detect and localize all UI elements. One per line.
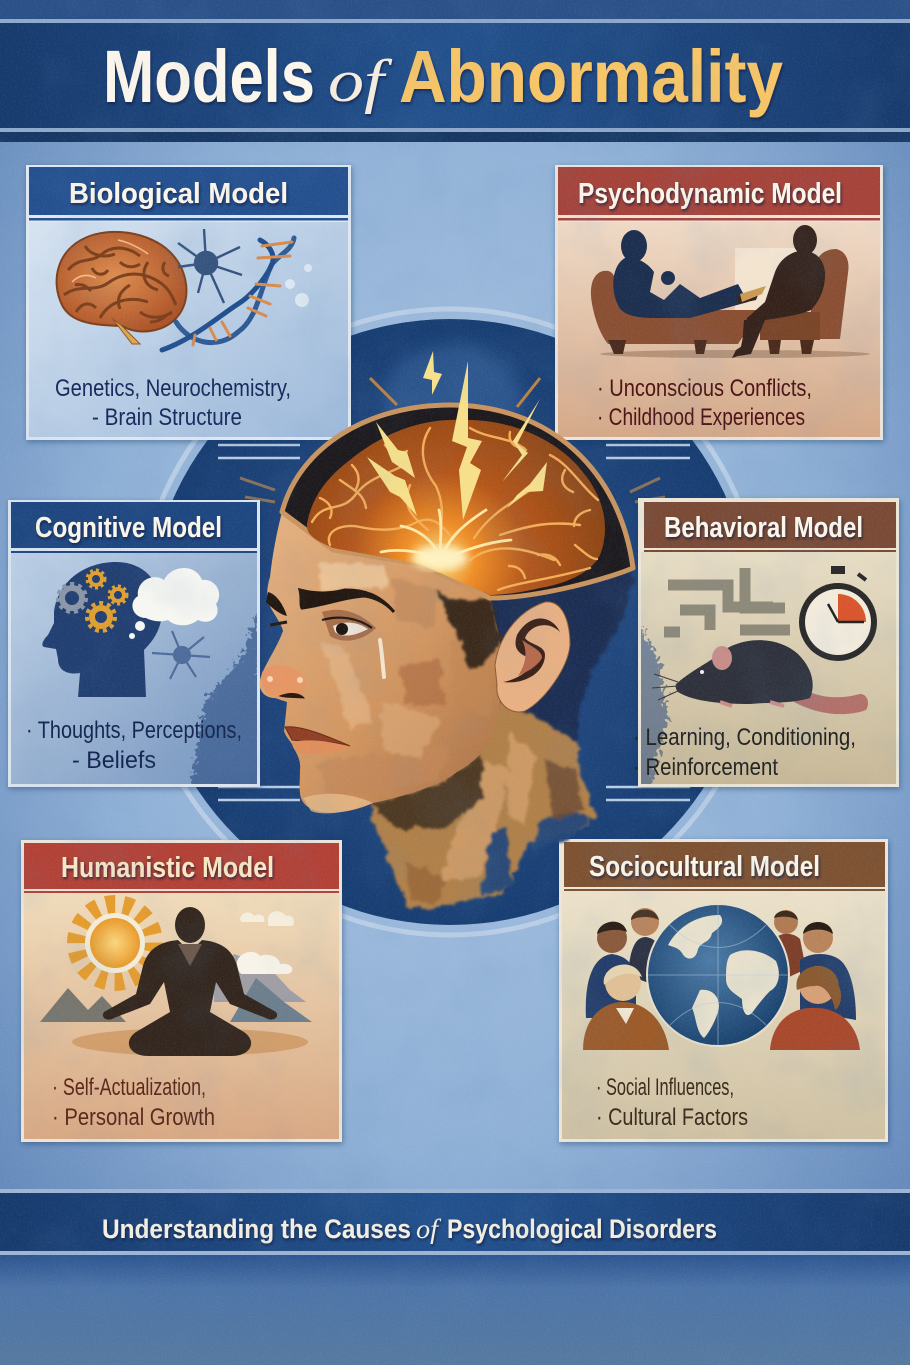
cognitive text: · Thoughts, Perceptions, xyxy=(26,717,242,744)
therapist silhouette xyxy=(732,225,825,358)
footer tagline: Understanding the Causes xyxy=(102,1214,411,1244)
cognitive heading xyxy=(11,502,257,553)
illustration: therapy session xyxy=(591,225,870,358)
humanistic heading xyxy=(24,843,339,893)
illustration: central head xyxy=(260,351,633,909)
icon: sun xyxy=(77,905,153,981)
behavioral text: · Learning, Conditioning, xyxy=(633,724,856,751)
panel: behavioral model xyxy=(633,498,899,790)
face painted details xyxy=(262,562,502,813)
sociocultural text: · Social Influences, xyxy=(596,1074,734,1101)
icon: thought cloud xyxy=(129,568,219,639)
panel: humanistic model xyxy=(21,840,342,1142)
hair tuft xyxy=(437,590,502,673)
icon: front row people xyxy=(583,965,860,1050)
icon: rat xyxy=(652,640,868,714)
icon: back row people xyxy=(586,908,856,1020)
ear xyxy=(495,602,570,712)
icon: glowing brain xyxy=(307,420,605,595)
behavioral text xyxy=(633,724,856,781)
sociocultural text: · Cultural Factors xyxy=(596,1104,748,1131)
icon: DNA helix xyxy=(162,238,312,350)
panel: sociocultural model xyxy=(559,839,888,1142)
psychodynamic text xyxy=(597,375,812,431)
biological text: - Brain Structure xyxy=(92,404,242,431)
biological text xyxy=(55,375,291,431)
icon: neuron xyxy=(178,229,242,303)
behavioral heading xyxy=(644,502,896,552)
patient silhouette xyxy=(613,230,748,318)
icon: brain xyxy=(57,232,186,344)
behavioral text: · Reinforcement xyxy=(633,754,778,781)
title: of xyxy=(328,48,393,114)
skull cavity and rim xyxy=(282,405,633,598)
humanistic text: · Personal Growth xyxy=(52,1104,215,1131)
cognitive text xyxy=(26,717,242,774)
cognitive heading: Cognitive Model xyxy=(35,512,222,544)
biological text: Genetics, Neurochemistry, xyxy=(55,375,291,402)
psychodynamic heading xyxy=(558,167,880,220)
face xyxy=(260,512,500,813)
icon: globe xyxy=(647,904,789,1046)
panel: biological model xyxy=(26,165,351,440)
psychodynamic text: · Childhood Experiences xyxy=(597,404,805,431)
panel: cognitive model xyxy=(8,500,262,790)
humanistic text xyxy=(52,1074,215,1131)
title xyxy=(103,35,783,118)
back of head xyxy=(490,570,633,742)
footer tagline xyxy=(102,1214,717,1244)
footer tagline: Psychological Disorders xyxy=(447,1214,717,1244)
biological heading xyxy=(29,167,348,220)
footer band xyxy=(0,1189,910,1365)
icon: stopwatch xyxy=(799,566,877,661)
psychodynamic heading: Psychodynamic Model xyxy=(578,178,842,210)
icon: maze xyxy=(664,568,790,632)
biological heading: Biological Model xyxy=(69,178,288,210)
neck xyxy=(373,700,597,909)
icon: head silhouette with gears xyxy=(42,562,162,697)
sociocultural heading: Sociocultural Model xyxy=(589,851,820,883)
central circle backdrop xyxy=(137,309,763,935)
icon: lightning bolts xyxy=(367,351,547,520)
top header band xyxy=(0,0,910,142)
title: Models xyxy=(103,35,315,118)
icon: meditating figure xyxy=(103,907,277,1056)
humanistic text: · Self-Actualization, xyxy=(52,1074,206,1101)
title: Abnormality xyxy=(399,35,783,118)
icon: neuron xyxy=(152,631,210,679)
cognitive text: - Beliefs xyxy=(72,747,156,774)
panel: psychodynamic model xyxy=(555,165,883,440)
psychodynamic text: · Unconscious Conflicts, xyxy=(597,375,812,402)
sociocultural text xyxy=(596,1074,748,1131)
behavioral heading: Behavioral Model xyxy=(664,512,863,544)
footer tagline: of xyxy=(416,1214,442,1244)
sociocultural heading xyxy=(564,842,885,891)
humanistic heading: Humanistic Model xyxy=(61,852,274,884)
icon: mountains and clouds xyxy=(40,911,312,1056)
